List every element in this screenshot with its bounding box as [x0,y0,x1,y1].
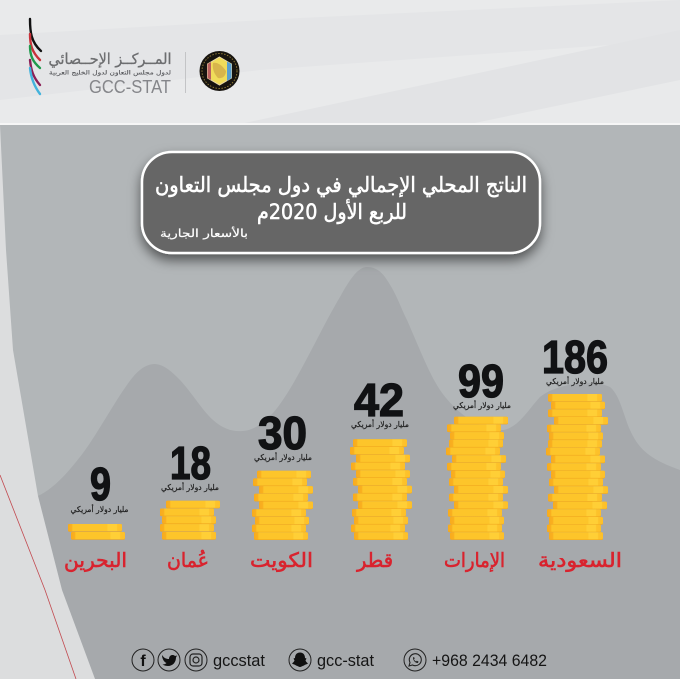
column: Oman [160,437,220,572]
icon: facebook: f [140,653,146,670]
value: 9 [90,458,111,510]
country name: قطر [356,548,393,572]
note: current prices: بالأسعار الجارية [160,226,248,240]
icon: snapchat [289,649,311,671]
header band [0,0,680,125]
heading line 1: الناتج المحلي الإجمالي في دول مجلس التعاون [155,173,527,197]
coin stack [446,417,508,540]
divider [185,52,186,93]
value: 42 [354,374,404,426]
coin stack [546,394,608,540]
country name: الكويت [250,548,313,572]
value: 30 [258,407,307,459]
handle: gcc-stat: gcc-stat [317,651,374,670]
coin stack [68,524,125,540]
icon: ribbon [30,19,41,94]
unit: مليار دولار أمريكي [351,419,409,429]
unit: مليار دولار أمريكي [70,504,128,514]
country name: عُمان [167,548,209,572]
coin stack [160,501,220,540]
icon: GCC seal [200,51,240,91]
value: 99 [458,355,504,407]
column: Bahrain [64,458,128,572]
column: Qatar [350,374,412,572]
unit: مليار دولار أمريكي [254,452,312,462]
phone number: +968 2434 6482 [432,651,547,670]
heading line 2: للربع الأول 2020م [257,199,407,224]
logo: GCC-STAT [30,19,240,97]
icon: instagram [185,649,207,671]
handle: gccstat: gccstat [213,651,265,670]
column: Saudi Arabia [538,331,622,572]
left curved band [0,125,95,679]
coin stack [252,471,313,540]
column: Kuwait [250,407,313,572]
title panel [142,152,540,253]
unit: مليار دولار أمريكي [546,376,604,386]
icon: whatsapp [404,649,426,671]
logo wordmark: GCC-STAT [89,77,171,97]
country name: الإمارات [444,548,505,572]
icon: facebook [132,649,154,671]
value: 186 [542,331,608,383]
column: UAE [444,355,511,572]
coin stack [350,439,412,540]
country name: البحرين [64,548,127,572]
unit: مليار دولار أمريكي [161,482,219,492]
footer contacts [132,649,547,671]
value: 18 [170,437,211,489]
logo subtitle: لدول مجلس التعاون لدول الخليج العربية [49,70,171,76]
country name: السعودية [538,548,622,572]
icon: twitter [158,649,180,671]
logo title: المــركــز الإحــصائي [48,50,172,69]
unit: مليار دولار أمريكي [453,400,511,410]
